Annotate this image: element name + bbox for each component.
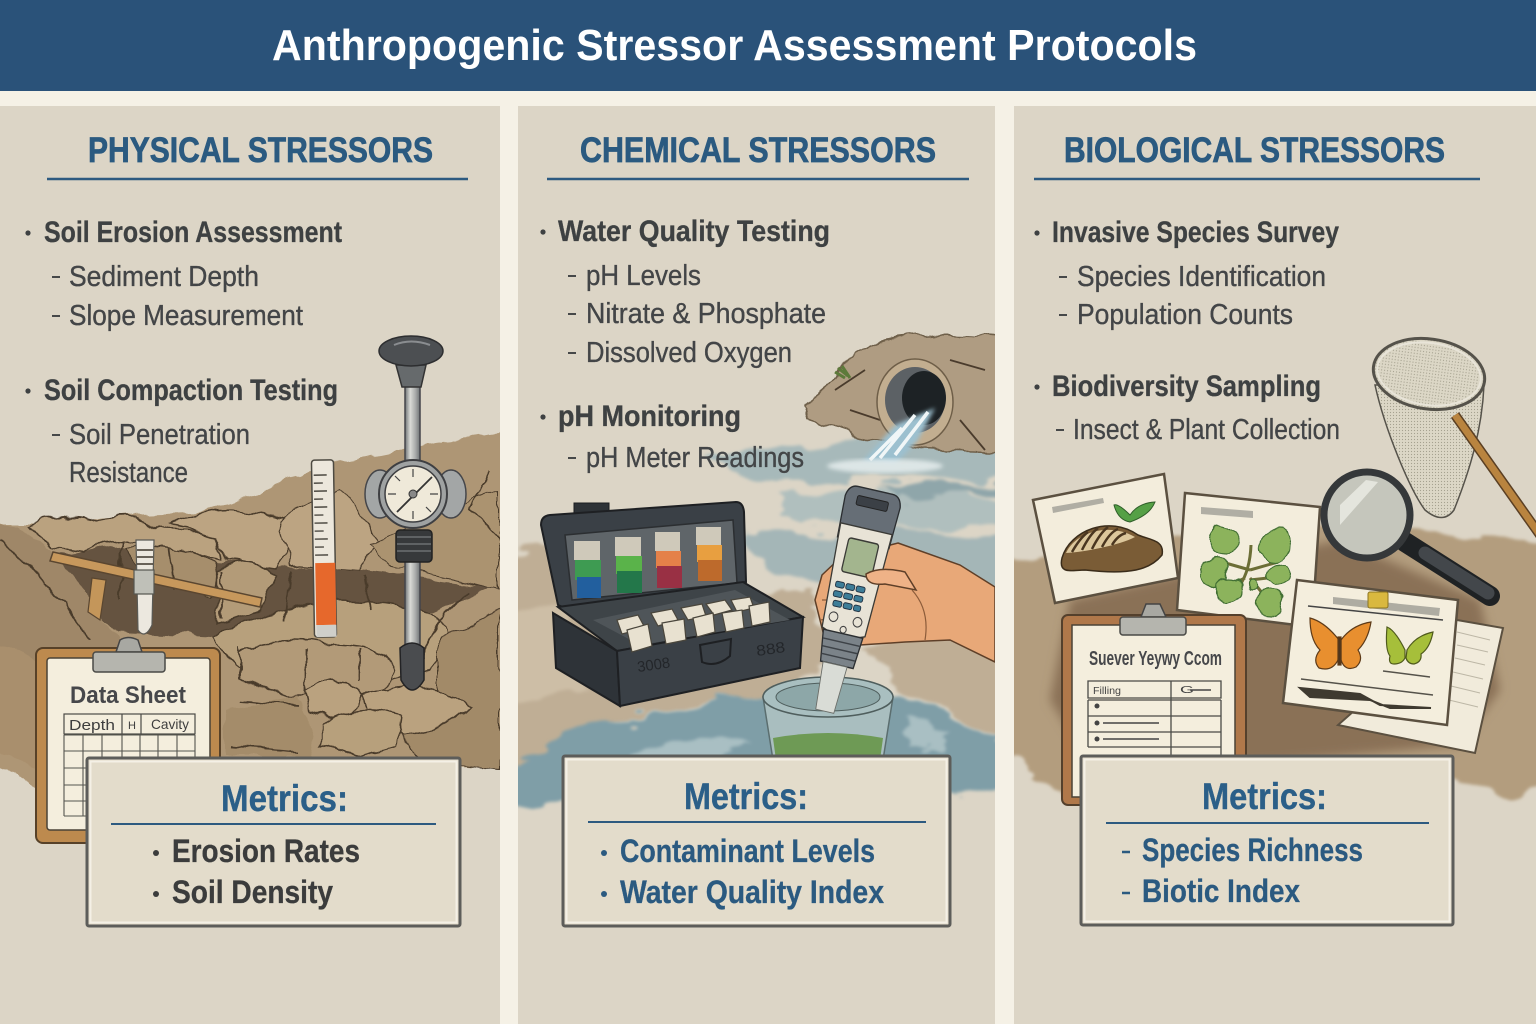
list: biodiversity sampling: Insect & Plant Collection bbox=[1073, 414, 1340, 446]
data table: Depth bbox=[69, 717, 115, 734]
illustration: eroded soil bbox=[0, 430, 520, 785]
list: water quality testing: Nitrate & Phosphate bbox=[586, 298, 826, 330]
icon: hand holding ph meter bbox=[814, 485, 995, 714]
data table: H bbox=[128, 720, 136, 732]
panel: biological stressors bbox=[1000, 106, 1536, 1024]
illustration: water and rocks bbox=[505, 440, 1010, 805]
icon: soil penetrometer bbox=[365, 336, 466, 690]
list: soil compaction testing: Resistance bbox=[69, 457, 188, 489]
list: invasive species survey: Population Counts bbox=[1077, 299, 1293, 331]
panel: chemical stressors bbox=[505, 106, 1010, 1024]
list: soil compaction testing: Soil Penetration bbox=[69, 419, 250, 451]
metrics box: chemical bbox=[563, 756, 950, 926]
text: case markings: 3008 bbox=[636, 655, 671, 676]
text: survey form title: Suever Yeywy Ccom bbox=[1089, 648, 1222, 670]
data table: Cavity bbox=[151, 716, 189, 732]
list: water quality testing bbox=[540, 215, 830, 369]
text: data sheet label: Data Sheet bbox=[70, 682, 186, 709]
metrics box: biological bbox=[1081, 756, 1453, 925]
foam cubes bbox=[617, 597, 770, 652]
icon: discharge pipe bbox=[803, 335, 1000, 473]
color vials bbox=[574, 527, 722, 598]
heading: biological stressors: BIOLOGICAL STRESSORS bbox=[1064, 131, 1445, 170]
list: soil erosion assessment bbox=[25, 216, 342, 332]
list: ph monitoring bbox=[540, 400, 804, 474]
data table bbox=[64, 714, 195, 816]
metrics box: physical: Soil Density bbox=[172, 874, 333, 910]
icon: magnifying glass bbox=[1324, 472, 1490, 596]
list: biodiversity sampling bbox=[1034, 370, 1340, 446]
header banner bbox=[0, 0, 1536, 91]
list: soil compaction testing: Soil Compaction Testing bbox=[44, 374, 338, 407]
metrics box: physical bbox=[87, 758, 460, 926]
survey table: Filling bbox=[1093, 686, 1121, 697]
card: snail specimen bbox=[1033, 474, 1178, 603]
list: water quality testing: pH Levels bbox=[586, 260, 701, 292]
metrics box: physical: Erosion Rates bbox=[172, 833, 360, 869]
list: soil erosion assessment: Sediment Depth bbox=[69, 261, 259, 293]
icon: clipboard data sheet bbox=[36, 638, 220, 843]
survey table bbox=[1088, 681, 1221, 760]
list: ph monitoring: pH Meter Readings bbox=[586, 442, 804, 474]
list: invasive species survey bbox=[1034, 216, 1339, 331]
metrics box: chemical: Water Quality Index bbox=[620, 874, 884, 910]
metrics box: chemical: Contaminant Levels bbox=[620, 833, 875, 869]
metrics box: biological: Species Richness bbox=[1142, 832, 1363, 868]
list: soil erosion assessment: Soil Erosion Assessment bbox=[44, 216, 342, 249]
icon: butterfly net bbox=[1369, 332, 1536, 535]
heading: chemical stressors: CHEMICAL STRESSORS bbox=[580, 131, 936, 170]
icon: test kit case bbox=[541, 502, 803, 706]
list: water quality testing: Water Quality Testing bbox=[558, 215, 830, 248]
butterfly: orange bbox=[1310, 618, 1371, 669]
butterfly: green bbox=[1386, 627, 1433, 664]
icon: depth stake and bar bbox=[50, 540, 262, 634]
icon: test kit case: 888 bbox=[755, 639, 786, 660]
list: water quality testing: Dissolved Oxygen bbox=[586, 337, 792, 369]
list: invasive species survey: Invasive Species Survey bbox=[1052, 216, 1339, 249]
list: invasive species survey: Species Identification bbox=[1077, 261, 1326, 293]
survey table: G bbox=[1180, 685, 1194, 696]
icon: clipboard survey form bbox=[1062, 604, 1246, 805]
metrics box: biological: Metrics: bbox=[1202, 776, 1327, 817]
illustration: soil ground bbox=[1000, 525, 1536, 800]
card: butterfly specimens bbox=[1283, 580, 1458, 725]
icon: sample cup bbox=[763, 677, 893, 760]
metrics box: chemical: Metrics: bbox=[684, 776, 808, 817]
metrics box: physical: Metrics: bbox=[221, 778, 348, 819]
list: soil compaction testing bbox=[25, 374, 338, 489]
heading: physical stressors: PHYSICAL STRESSORS bbox=[88, 131, 433, 170]
card: plant specimen bbox=[1177, 493, 1320, 627]
metrics box: biological: Biotic Index bbox=[1142, 873, 1300, 909]
panel: physical stressors bbox=[0, 106, 520, 1024]
list: soil erosion assessment: Slope Measurement bbox=[69, 300, 303, 332]
list: biodiversity sampling: Biodiversity Sampling bbox=[1052, 370, 1321, 403]
card: back note sheet bbox=[1338, 620, 1503, 753]
icon: ruler thermometer bbox=[311, 460, 337, 637]
title: Anthropogenic Stressor Assessment Protocols bbox=[272, 21, 1197, 70]
list: ph monitoring: pH Monitoring bbox=[558, 400, 741, 433]
